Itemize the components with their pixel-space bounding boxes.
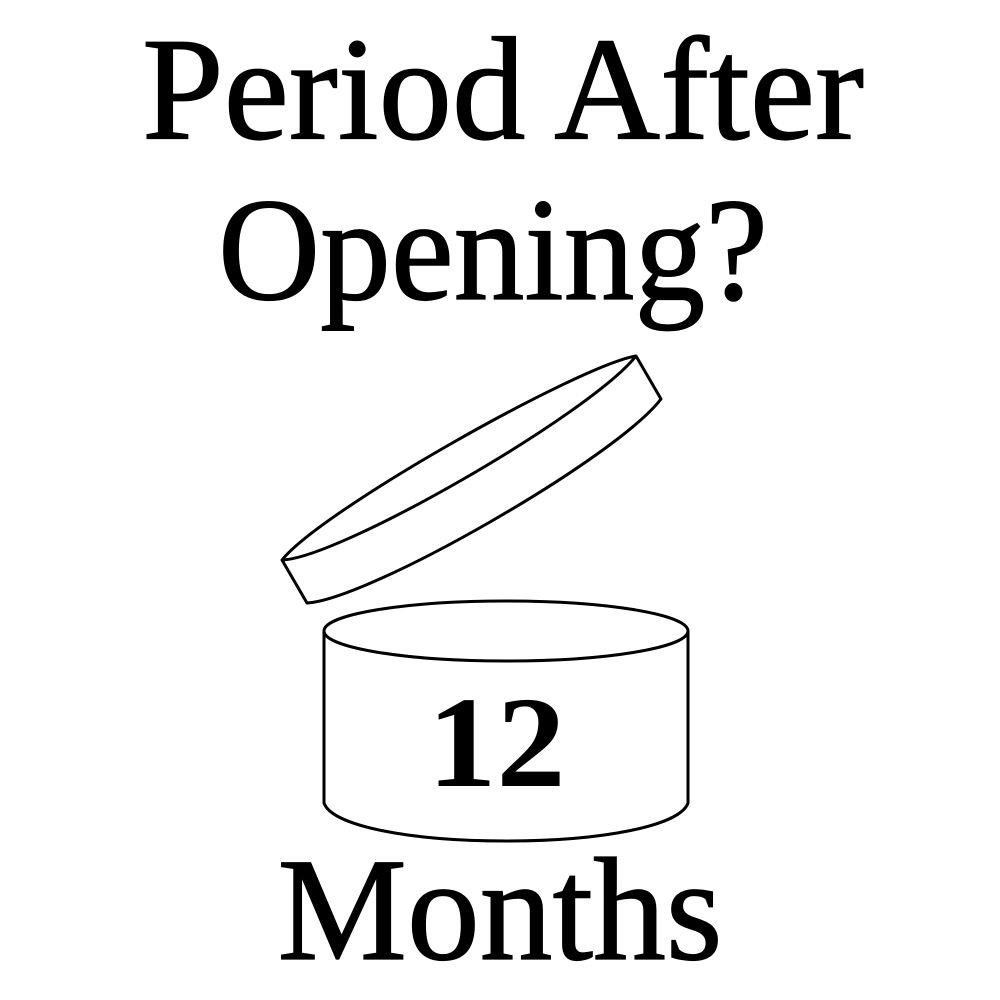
- jar number: 12: [428, 671, 566, 815]
- jar lid: [282, 356, 661, 603]
- jar body: [324, 601, 688, 841]
- icon: open jar: [282, 356, 688, 841]
- caption: months: Months: [278, 828, 722, 991]
- title line 2: Opening?: [218, 168, 768, 331]
- title line 1: Period After: [142, 8, 864, 170]
